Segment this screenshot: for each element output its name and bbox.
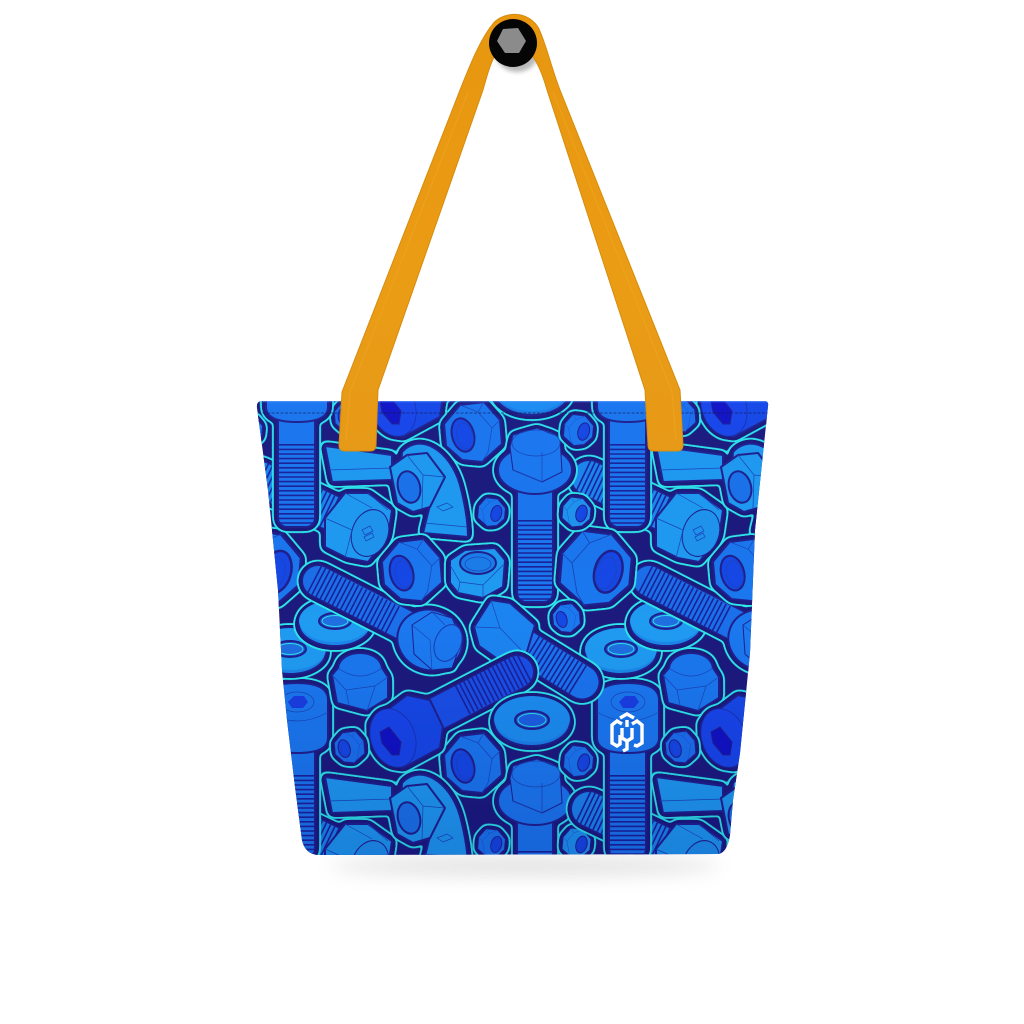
- pattern tile, upper objects: [252, 352, 632, 679]
- centre washer: [494, 696, 570, 746]
- hex nut top: [444, 402, 502, 462]
- hex bolt lying behind vertical bolt: [252, 475, 395, 562]
- small nut centre: [478, 498, 505, 526]
- washer rear left: [254, 628, 326, 674]
- washer front: [299, 600, 371, 646]
- pattern repeats, bottom row: [282, 677, 738, 855]
- small nut light: [562, 497, 591, 527]
- threaded flange bolt angled: [314, 579, 471, 679]
- hex bolt with threads: [474, 600, 582, 682]
- elbow fitting with wedge: [325, 444, 468, 537]
- hook centre hexagon: [497, 28, 526, 53]
- socket cap bolt vertical: [266, 352, 328, 527]
- orange strap handles: [339, 14, 683, 451]
- small nut lower left: [334, 731, 365, 763]
- bag navy fabric: [250, 395, 775, 855]
- black wall hook: [489, 19, 537, 67]
- strap stitching highlights: [346, 92, 676, 440]
- flange bolt: [498, 428, 572, 602]
- socket bolt deep blue: [362, 667, 526, 774]
- top edge highlight: [258, 401, 768, 402]
- bag ground shadow: [330, 856, 720, 876]
- hook shadow: [494, 26, 540, 72]
- hex nut mid left: [382, 539, 442, 601]
- shading overlay: [283, 678, 746, 855]
- pattern tile, lower objects: [332, 600, 582, 774]
- top hem stitching: [258, 412, 768, 414]
- cap nut: [332, 653, 388, 711]
- tote bag body with nuts and bolts pattern: [256, 401, 768, 855]
- small nut upper right: [563, 414, 594, 446]
- big hex nut: [560, 530, 632, 606]
- logo on socket bolt: [612, 714, 642, 751]
- flat hex nut: [450, 548, 505, 598]
- small nut lower middle: [553, 604, 580, 632]
- pattern repeats, side columns: [0, 352, 963, 774]
- pattern repeats, top row: [329, 401, 768, 442]
